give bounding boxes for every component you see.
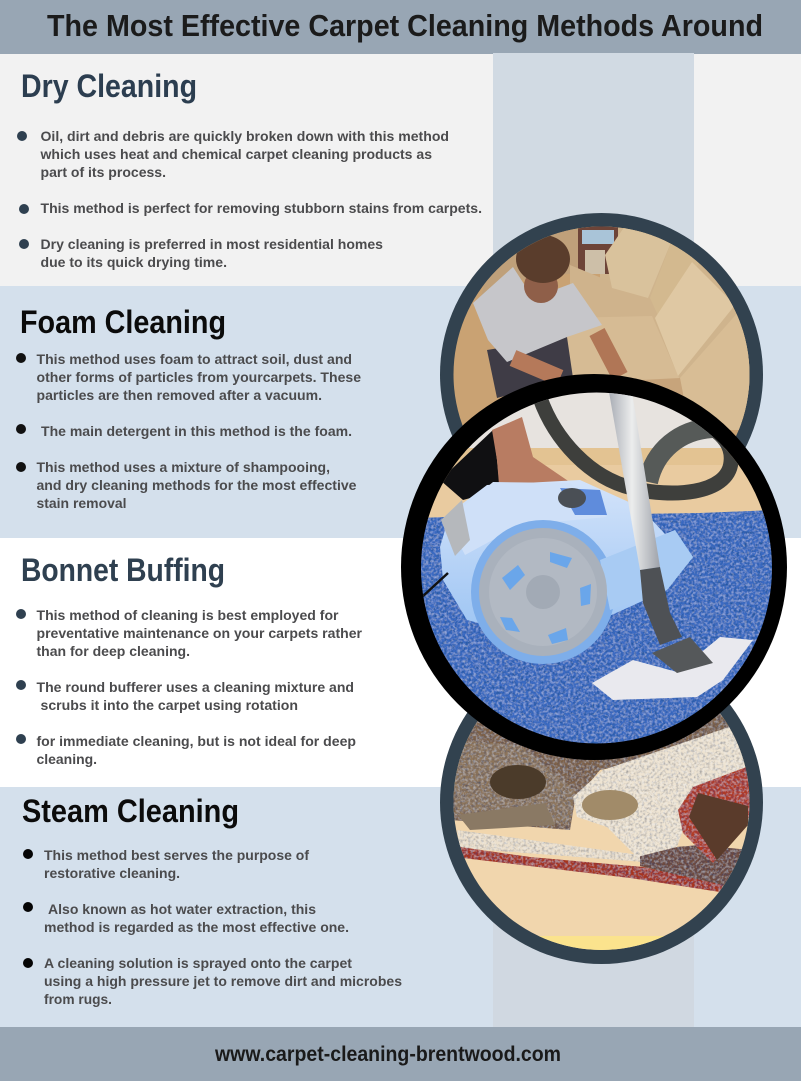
bullet 1: particles are then removed after a vacuum. bbox=[36, 387, 322, 403]
header band bbox=[0, 0, 801, 54]
photo circle: blue vacuum on blue carpet bbox=[401, 374, 787, 760]
bullet 2: The round bufferer uses a cleaning mixture and bbox=[36, 679, 354, 695]
bullet 2 bbox=[16, 679, 354, 713]
bullet 1 bbox=[16, 607, 363, 659]
bullet 1: other forms of particles from yourcarpets. These bbox=[36, 369, 361, 385]
bullet 3 bbox=[16, 733, 356, 767]
photo circle: rolled carpets bbox=[440, 704, 763, 964]
bullet 3: This method uses a mixture of shampooing, bbox=[36, 459, 330, 475]
bullet 3: Dry cleaning is preferred in most residential homes bbox=[40, 236, 383, 252]
footer url: www.carpet-cleaning-brentwood.com bbox=[214, 1043, 561, 1066]
bullet 1: This method of cleaning is best employed for bbox=[36, 607, 339, 623]
bullet 1: preventative maintenance on your carpets rather bbox=[36, 625, 363, 641]
bullet 1: part of its process. bbox=[40, 164, 166, 180]
panel: dry cleaning bbox=[0, 54, 801, 286]
sleeve and hand bbox=[440, 430, 500, 500]
footer band bbox=[0, 1027, 801, 1081]
bullet 1 bbox=[17, 128, 449, 180]
bullet 3: stain removal bbox=[36, 495, 126, 511]
bullet 3 bbox=[19, 236, 383, 270]
bullet 2: Also known as hot water extraction, this bbox=[48, 901, 316, 917]
bullet 3: and dry cleaning methods for the most effective bbox=[36, 477, 357, 493]
bullet 3: from rugs. bbox=[44, 991, 112, 1007]
bullet 3 bbox=[16, 459, 357, 511]
vacuum body bbox=[440, 480, 693, 637]
heading: dry cleaning: Dry Cleaning bbox=[21, 68, 197, 104]
bullet 3: for immediate cleaning, but is not ideal for deep bbox=[36, 733, 356, 749]
bullet 2: The main detergent in this method is the foam. bbox=[41, 423, 352, 439]
wheel bbox=[479, 528, 607, 656]
bullet 3: using a high pressure jet to remove dirt and microbes bbox=[44, 973, 402, 989]
bullet 3 bbox=[23, 955, 402, 1007]
bullet 2: This method is perfect for removing stubborn stains from carpets. bbox=[40, 200, 482, 216]
bullet 3: cleaning. bbox=[36, 751, 97, 767]
bullet 1: Oil, dirt and debris are quickly broken down with this method bbox=[40, 128, 449, 144]
bullet 3: A cleaning solution is sprayed onto the carpet bbox=[44, 955, 352, 971]
vertical column: backdrop behind photos bbox=[493, 53, 694, 1027]
bullet 1 bbox=[23, 847, 309, 881]
bullet 3: due to its quick drying time. bbox=[40, 254, 227, 270]
bullet 2 bbox=[23, 901, 349, 935]
panel: steam cleaning bbox=[0, 787, 801, 1027]
bullet 1: restorative cleaning. bbox=[44, 865, 180, 881]
vacuum hose bbox=[540, 398, 731, 493]
bullet 1: than for deep cleaning. bbox=[36, 643, 190, 659]
bullet 1: which uses heat and chemical carpet cleaning products as bbox=[39, 146, 432, 162]
heading: foam cleaning: Foam Cleaning bbox=[20, 304, 226, 340]
bullet 1 bbox=[16, 351, 361, 403]
title: The Most Effective Carpet Cleaning Methods Around bbox=[47, 8, 763, 43]
bullet 2: method is regarded as the most effective one. bbox=[44, 919, 349, 935]
heading: bonnet buffing: Bonnet Buffing bbox=[21, 552, 225, 588]
panel: bonnet buffing bbox=[0, 538, 801, 787]
bullet 1: This method best serves the purpose of bbox=[44, 847, 309, 863]
bullet 1: This method uses foam to attract soil, dust and bbox=[36, 351, 352, 367]
bullet 2: scrubs it into the carpet using rotation bbox=[40, 697, 298, 713]
vacuum tube and nozzle bbox=[609, 392, 660, 570]
heading: steam cleaning: Steam Cleaning bbox=[22, 793, 239, 829]
panel: foam cleaning bbox=[0, 286, 801, 538]
photo circle: man cleaning sofa bbox=[440, 213, 763, 448]
